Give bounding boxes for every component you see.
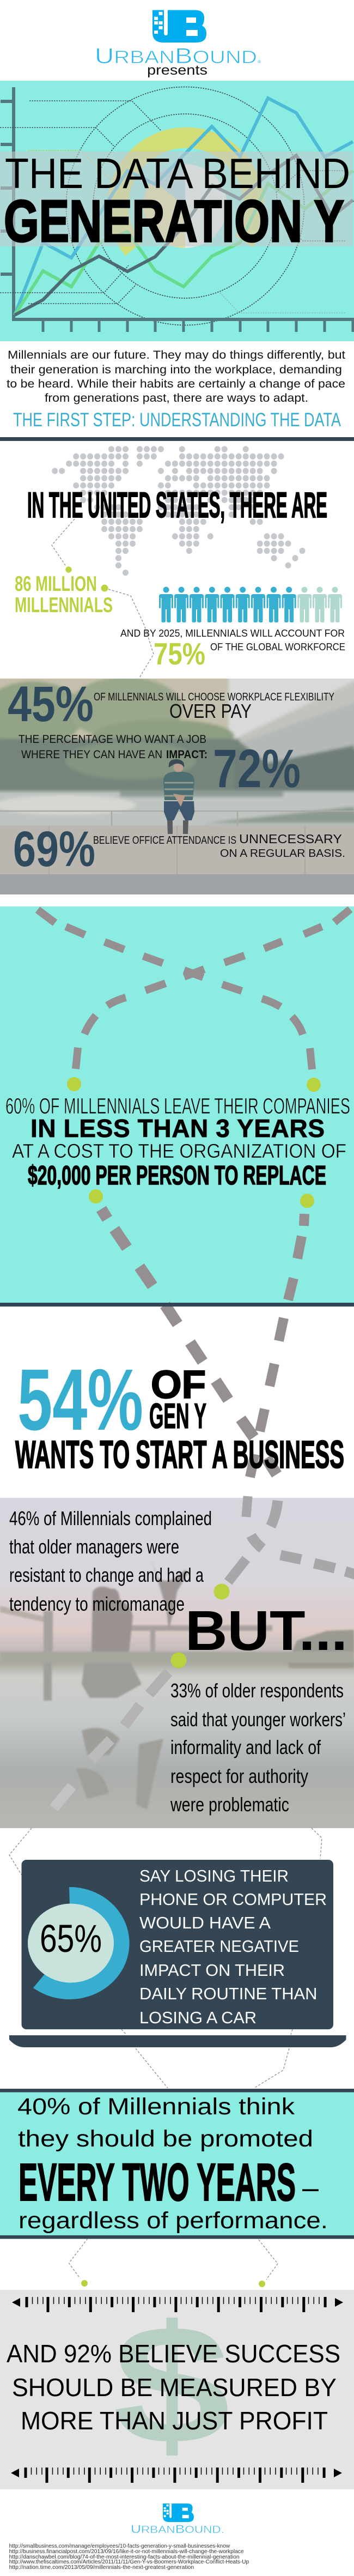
chart: green line — [15, 171, 353, 315]
marker dots — [67, 1077, 321, 1092]
stat: 45 percent — [8, 676, 334, 732]
stat: 45 percent: OVER PAY — [169, 700, 252, 722]
panel: success — [0, 2290, 354, 2489]
laptop base — [9, 2035, 346, 2047]
fading dashed paths — [54, 1672, 168, 1808]
stat: global workforce: OF THE GLOBAL WORKFORCE — [210, 642, 345, 652]
donut chart: 65 percent: 65% — [40, 1918, 102, 1961]
chart: dotted leader lines — [0, 101, 345, 313]
logo: UrbanBound header — [95, 10, 257, 68]
logo: UrbanBound footer — [131, 2504, 224, 2536]
stat: 72 percent: IMPACT: — [166, 748, 207, 761]
text: 92 percent: SHOULD BE MEASURED BY — [12, 2373, 337, 2402]
laptop screen — [22, 1860, 333, 2029]
text: older respondents: respect for authority — [170, 1765, 308, 1787]
chart: blue line — [15, 98, 353, 315]
stat: 69 percent: ON A REGULAR BASIS. — [220, 848, 345, 860]
text: losing phone: WOULD HAVE A — [139, 1913, 271, 1932]
panel: start a business — [15, 1351, 344, 1477]
text: older managers — [9, 1507, 212, 1615]
text: older managers: tendency to micromanage — [9, 1593, 185, 1615]
stat: 69 percent: 69% — [13, 821, 95, 877]
text: losing phone: PHONE OR COMPUTER — [139, 1890, 327, 1909]
stat: 69 percent: BELIEVE OFFICE ATTENDANCE IS — [93, 835, 236, 846]
icon: ruler top — [12, 2298, 343, 2307]
stat: 72 percent: 72% — [213, 738, 301, 799]
icon: ruler bottom — [11, 2469, 342, 2477]
connector to photo — [108, 589, 154, 679]
stat: 72 percent: WHERE THEY CAN HAVE AN — [21, 748, 162, 761]
dashed paths into business panel — [101, 1209, 304, 1477]
text: think promoted: they should be promoted — [18, 2126, 313, 2152]
source list: http://www.thefiscaltimes.com/Articles/2011/11/11/Gen-Y-vs-Boomers-Workplace-Conflict-Heats-Up — [9, 2559, 249, 2565]
intro paragraph: Millennials are our future. They may do things differently, but — [8, 349, 345, 361]
icon row: 75 percent of people — [159, 586, 342, 622]
text: older managers: resistant to change and had a — [9, 1564, 204, 1586]
wordmark: URBAN BOUND — [95, 44, 257, 68]
marker dot — [65, 566, 72, 573]
text: think promoted — [17, 2094, 313, 2152]
marker dots — [89, 1189, 314, 1208]
marker dot — [213, 1584, 230, 1599]
text: losing phone: IMPACT ON THEIR — [139, 1961, 285, 1980]
divider bar — [0, 1303, 354, 1307]
person — [163, 759, 194, 834]
stat: 69 percent: UNNECESSARY — [239, 832, 342, 846]
text: in less than 3 years: IN LESS THAN 3 YEARS — [30, 1114, 325, 1142]
source list: http://smallbusiness.com/manage/employees/10-facts-generation-y-small-businesses-know — [9, 2543, 230, 2549]
text: but: BUT... — [185, 1599, 347, 1662]
stat: 72 percent: THE PERCENTAGE WHO WANT A JOB — [19, 733, 206, 746]
dashed paths in photo — [228, 1496, 354, 1582]
stat: 72 percent — [19, 733, 301, 799]
source list: http://danschawbel.com/blog/74-of-the-most-interesting-facts-about-the-millennial-generation — [9, 2554, 240, 2560]
text: losing phone: GREATER NEGATIVE — [139, 1937, 299, 1956]
divider bar — [0, 437, 354, 441]
intro paragraph: from generations past, there are ways to adapt. — [45, 392, 308, 404]
stat: 86 million millennials — [15, 572, 113, 617]
stat: 54 percent: 54% — [17, 1351, 143, 1448]
text: losing phone: DAILY ROUTINE THAN — [139, 1984, 317, 2003]
source list: http://business.financialpost.com/2013/09/16/like-it-or-not-millennials-will-change-the-workplace — [9, 2548, 244, 2555]
marker dot — [101, 584, 108, 592]
connectors to laptop — [9, 1828, 322, 2088]
stat: 86 million millennials: MILLENNIALS — [15, 594, 113, 617]
world dot map — [55, 449, 302, 573]
text: older managers: that older managers were — [9, 1535, 179, 1558]
intro paragraph: to be heard. While their habits are certainly a change of pace — [7, 378, 345, 390]
stat: 45 percent: 45% — [8, 676, 94, 732]
text: 92 percent: AND 92% BELIEVE SUCCESS — [7, 2339, 340, 2368]
panel: leaving companies — [0, 906, 354, 1303]
chart: donut behind title — [118, 138, 254, 249]
presents: presents — [147, 63, 207, 78]
text: gen y: GEN Y — [149, 1396, 206, 1436]
panel: photo statistics — [0, 673, 354, 894]
text: 92 percent — [7, 2339, 340, 2435]
stat: global workforce: AND BY 2025, MILLENNIALS WILL ACCOUNT FOR — [120, 628, 345, 639]
source list: http://nation.time.com/2013/05/09/millennials-the-next-greatest-generation — [9, 2564, 194, 2571]
stat: 69 percent — [13, 821, 345, 877]
panel: managers versus workers — [0, 1496, 354, 1828]
chart: axes — [1, 87, 354, 332]
connector to 86 million — [52, 519, 75, 565]
text: regardless: regardless of performance. — [19, 2208, 328, 2234]
text: losing phone: LOSING A CAR — [139, 2008, 257, 2027]
panel: world map statistics — [15, 449, 345, 679]
photo: man sitting by river — [0, 673, 354, 894]
text: older respondents — [170, 1679, 346, 1816]
text: losing phone: SAY LOSING THEIR — [139, 1866, 289, 1885]
wordmark: URBAN BOUND. — [131, 2523, 224, 2536]
stat: 86 million millennials: 86 MILLION — [15, 572, 97, 596]
chart: dotted circles — [66, 87, 304, 325]
text: older respondents: were problematic — [170, 1793, 289, 1816]
en dash: – — [302, 2172, 319, 2204]
title band — [0, 152, 353, 246]
panel: laptop with 65 percent — [9, 1860, 346, 2047]
donut chart: 65 percent — [28, 1887, 130, 1999]
icon: dollar sign: $ — [113, 2290, 230, 2479]
text: losing phone — [139, 1866, 327, 2027]
stat: global workforce — [120, 628, 345, 672]
text: think promoted: 40% of Millennials think — [17, 2094, 295, 2120]
text: older managers: 46% of Millennials complained — [9, 1507, 212, 1529]
intro paragraph — [7, 349, 345, 404]
text: of: OF — [151, 1363, 206, 1407]
chart: dark line — [15, 155, 353, 315]
source list — [9, 2543, 249, 2571]
text: 92 percent: MORE THAN JUST PROFIT — [21, 2406, 328, 2435]
marker dot — [171, 1653, 186, 1668]
intro paragraph: their generation is marching into the workplace, demanding — [10, 364, 342, 376]
registered mark: ® — [258, 59, 261, 64]
panel: promotion — [0, 2089, 354, 2239]
stat: global workforce: 75% — [154, 637, 205, 672]
dashed crossing paths — [38, 909, 350, 1069]
panel: title chart header — [0, 81, 354, 341]
photo: group on dock at sunset — [0, 1498, 354, 1828]
connectors to success panel — [69, 2239, 278, 2287]
